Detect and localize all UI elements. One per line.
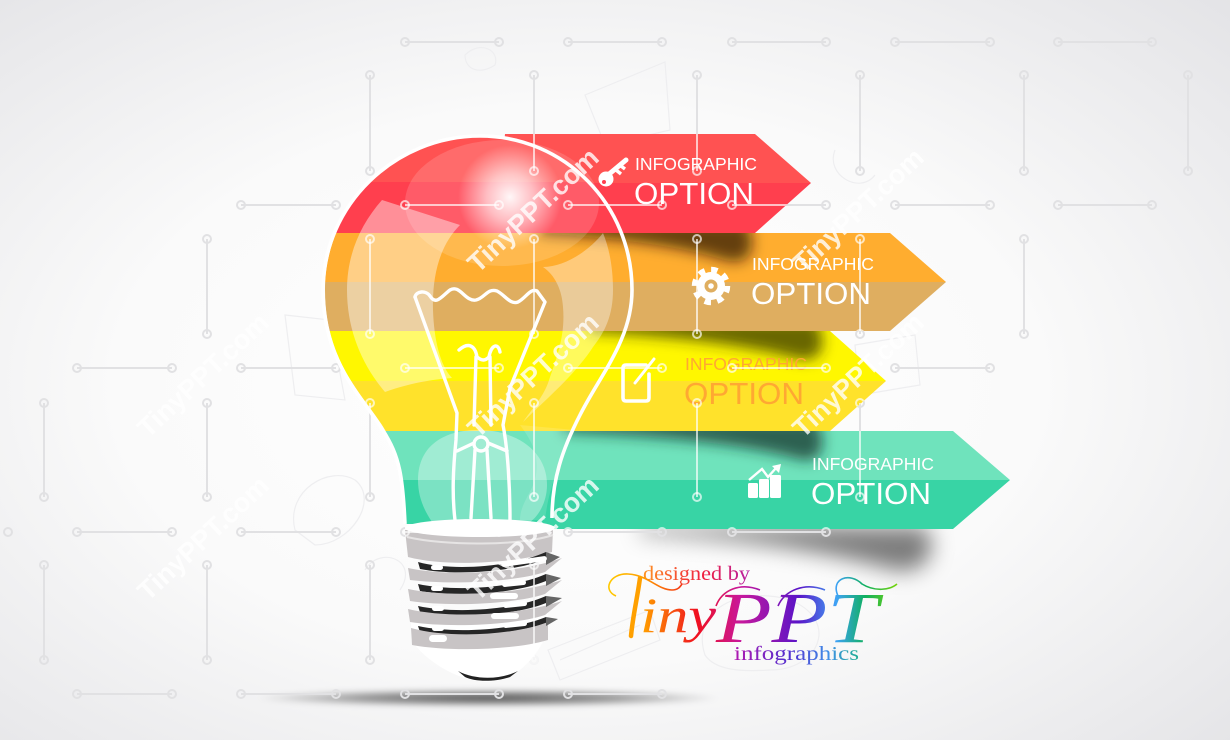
option label: red: INFOGRAPHIC [635,154,757,174]
watermarks: TinyPPT.com [462,142,605,278]
watermarks: TinyPPT.com [787,142,930,278]
screw base [405,519,562,682]
watermarks: TinyPPT.com [462,470,605,606]
option label: yellow: INFOGRAPHIC [685,354,807,374]
option label: green [811,454,934,511]
glass highlights [347,140,613,522]
watermarks: TinyPPT.com [132,470,275,606]
logo: designed by TinyPPT infographics: iny [640,587,717,643]
arrow drop shadows [540,222,822,460]
icon: edit [623,359,654,401]
shadow under green arrow [640,527,932,571]
watermarks: TinyPPT.com [787,307,930,443]
watermarks: TinyPPT.com [462,307,605,443]
bulb colour bands [325,138,587,524]
arrow: yellow [500,331,886,431]
option label: orange: INFOGRAPHIC [752,254,874,274]
arrow: orange [500,233,946,331]
icon: gear [694,270,728,302]
option label: red: OPTION [634,176,754,211]
watermarks: TinyPPT.com [132,307,275,443]
logo: designed by TinyPPT infographics: designed by [643,563,750,585]
logo: designed by TinyPPT infographics: infographics [734,643,859,665]
icon: key [598,160,626,186]
option label: green: OPTION [811,476,931,511]
logo: designed by TinyPPT infographics [609,563,897,665]
background doodles [285,48,920,680]
filament [415,289,545,520]
arrow: red [500,134,811,233]
option label: green: INFOGRAPHIC [812,454,934,474]
option label: red [634,154,757,211]
option label: yellow [684,354,807,411]
option label: orange [751,254,874,311]
network line pattern: overlay on bulb and arrows [365,134,865,665]
logo: designed by TinyPPT infographics: PPT [715,578,884,658]
watermarks [132,142,930,606]
option label: orange: OPTION [751,276,871,311]
ground shadow [256,689,720,707]
bulb outline [323,136,632,524]
icon: chart [748,464,781,498]
arrow: green [500,431,1010,529]
option label: yellow: OPTION [684,376,804,411]
